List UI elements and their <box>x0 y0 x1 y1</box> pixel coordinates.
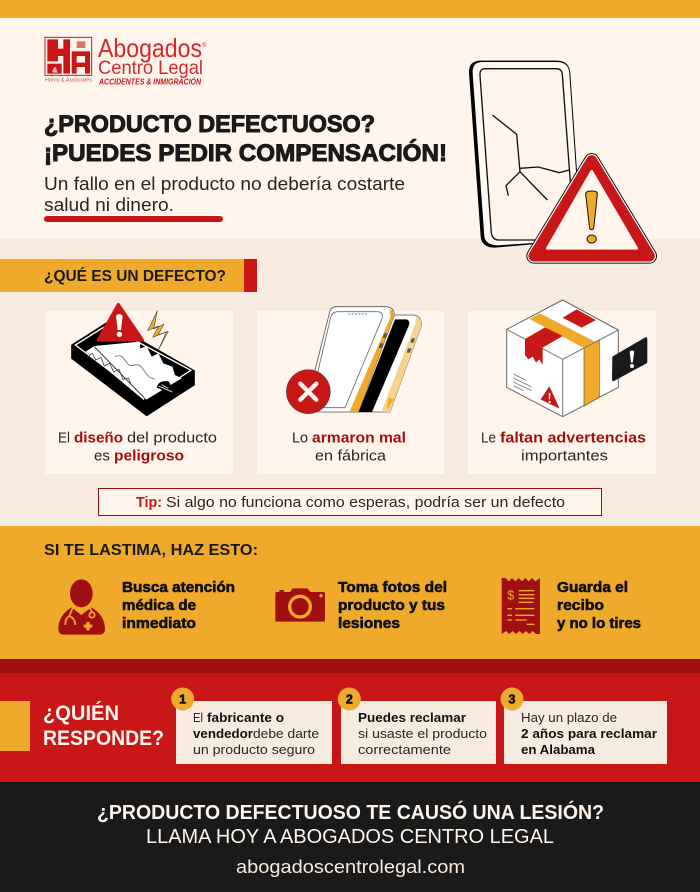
panel: footer call to action: ¿PRODUCTO DEFECTUOSO TE CAUSÓ UNA LESIÓN? <box>97 800 604 824</box>
text: toma fotos: producto y tus <box>338 597 445 614</box>
heading <box>43 702 164 750</box>
step 2: si usaste el producto <box>358 726 487 741</box>
heading: SI TE LASTIMA, HAZ ESTO: <box>44 542 258 559</box>
step 3: en Alabama <box>521 742 596 757</box>
divider band <box>0 659 700 673</box>
step 3: 2 años para reclamar <box>521 726 657 741</box>
step 2 <box>338 688 496 764</box>
card text: en fábrica <box>315 448 387 464</box>
step 3 <box>500 688 667 764</box>
logo: ® <box>202 42 207 49</box>
text: guarda recibo: y no lo tires <box>557 615 641 632</box>
section heading: qué es un defecto: ¿QUÉ ES UN DEFECTO? <box>44 266 226 285</box>
logo: Harris & Associates <box>45 78 93 84</box>
heading: ¿QUIÉN <box>43 702 119 725</box>
accent block <box>0 701 30 751</box>
icon: two phones with error mark <box>286 307 422 414</box>
step 3: 3 <box>509 692 516 706</box>
card: diseño peligroso <box>45 305 233 474</box>
tip callout: Si algo no funciona como esperas, podría ser un defecto <box>166 495 565 511</box>
text: atención médica: Busca atención <box>122 579 235 596</box>
icon: cracked phone with warning triangle <box>469 61 649 256</box>
card text: peligroso <box>114 448 184 464</box>
card text <box>58 430 217 464</box>
step 1: vendedor <box>193 726 253 741</box>
step 2: correctamente <box>358 742 451 757</box>
subtitle: Un fallo en el producto no debería costarte <box>44 174 405 194</box>
card text <box>481 430 646 464</box>
card text: Le <box>481 430 496 446</box>
step 1: fabricante o <box>207 710 284 725</box>
card text: armaron mal <box>312 430 406 446</box>
step 3: Hay un plazo de <box>521 710 617 725</box>
section heading: qué es un defecto <box>0 259 257 292</box>
text: atención médica: inmediato <box>122 615 196 632</box>
card text: faltan advertencias <box>500 430 646 446</box>
card text: importantes <box>521 448 608 464</box>
icon: package with warnings <box>507 300 647 417</box>
step 1: 1 <box>179 692 186 706</box>
card text: del producto <box>127 430 217 446</box>
subtitle underline <box>44 216 223 222</box>
text: guarda recibo: Guarda el <box>557 579 628 596</box>
card text: El <box>58 430 70 446</box>
text: toma fotos: lesiones <box>338 615 400 632</box>
panel: footer call to action: LLAMA HOY A ABOGADOS CENTRO LEGAL <box>146 826 554 848</box>
icon: receipt: $ <box>507 588 514 602</box>
tip callout <box>98 488 602 516</box>
card text: diseño <box>74 430 123 446</box>
defect section panel <box>0 239 700 526</box>
step 2: 2 <box>346 692 353 706</box>
subtitle: salud ni dinero. <box>44 195 174 215</box>
card: armaron mal <box>257 307 444 474</box>
logo: Abogados <box>98 33 202 63</box>
panel: si te lastima <box>0 526 700 659</box>
step 1: un producto seguro <box>193 742 315 757</box>
subtitle <box>44 174 405 215</box>
title: ¡PUEDES PEDIR COMPENSACIÓN! <box>44 139 447 167</box>
icon: camera <box>275 588 325 622</box>
logo: ACCIDENTES & INMIGRACIÓN <box>98 78 201 86</box>
text: toma fotos <box>338 579 447 632</box>
text: atención médica: médica de <box>122 597 196 614</box>
logo: & <box>52 66 58 74</box>
icon: doctor <box>58 579 105 635</box>
card: faltan advertencias <box>468 300 656 474</box>
step 1: El <box>193 710 203 725</box>
icon: receipt <box>502 578 540 634</box>
top bar <box>0 0 700 18</box>
step 1: debe darte <box>253 726 319 741</box>
text: atención médica <box>122 579 235 632</box>
step 2: Puedes reclamar <box>358 710 466 725</box>
panel: footer call to action <box>0 782 700 892</box>
panel: footer call to action: abogadoscentrolegal.com <box>236 856 465 877</box>
tip callout: Tip: <box>136 495 162 511</box>
title: ¿PRODUCTO DEFECTUOSO? <box>44 111 375 138</box>
step 1 <box>171 688 332 764</box>
card text: Lo <box>292 430 308 446</box>
card text <box>292 430 406 464</box>
text: guarda recibo <box>557 579 641 632</box>
heading: RESPONDE? <box>43 727 164 750</box>
card text: es <box>94 448 110 464</box>
header panel <box>0 18 700 239</box>
text: guarda recibo: recibo <box>557 597 604 614</box>
logo <box>45 33 207 86</box>
title <box>44 111 447 167</box>
text: toma fotos: Toma fotos del <box>338 579 447 596</box>
logo: Centro Legal <box>98 58 203 79</box>
icon: dangerous tray with warning and lightning <box>72 305 194 416</box>
panel: quién responde <box>0 673 700 782</box>
